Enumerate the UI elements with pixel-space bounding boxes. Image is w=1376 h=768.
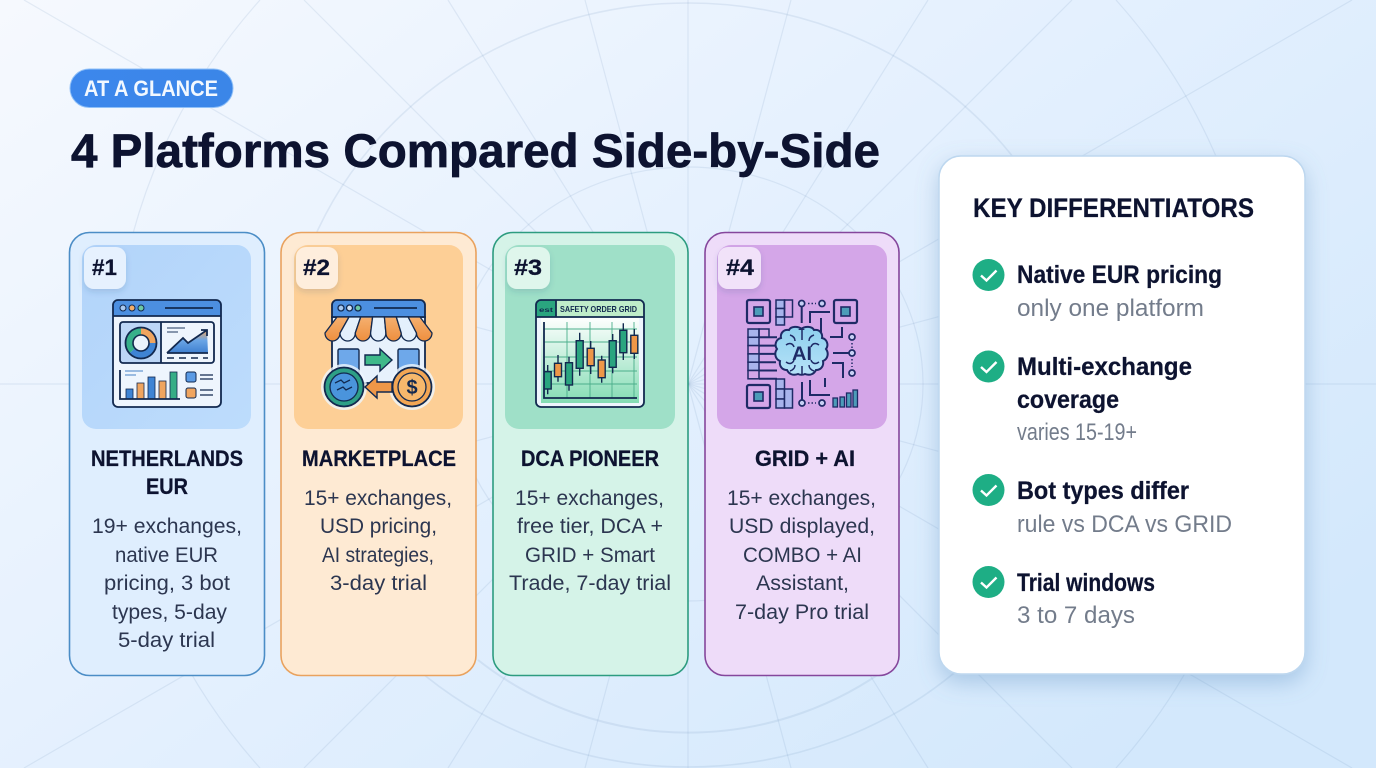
body: card 3: Trade, 7-day trial	[509, 571, 671, 595]
icon panel 1	[82, 245, 251, 429]
rank badge 3	[507, 247, 550, 289]
heading: Marketplace: MARKETPLACE	[302, 446, 456, 471]
icon panel 3	[505, 245, 675, 429]
icon: safety order grid candlestick chart: SAFETY ORDER GRID	[560, 304, 637, 314]
item: native EUR pricing: only one platform	[1017, 295, 1204, 322]
body: card 1: 19+ exchanges,	[92, 514, 242, 538]
heading: DCA Pioneer: DCA PIONEER	[521, 446, 659, 471]
body: card 1: 5-day trial	[118, 628, 215, 652]
item: bot types differ	[972, 474, 1232, 538]
icon: analytics dashboard window	[113, 300, 221, 407]
body: card 3: 15+ exchanges,	[515, 486, 664, 510]
body: card 3: free tier, DCA +	[517, 514, 663, 538]
rank badge 2	[296, 247, 338, 289]
body: card 4	[727, 486, 876, 624]
body: card 2: USD pricing,	[320, 514, 437, 538]
body: card 4: Assistant,	[756, 571, 849, 595]
heading: Netherlands EUR: NETHERLANDS	[91, 446, 243, 471]
item: multi-exchange coverage: coverage	[1017, 386, 1119, 414]
item: bot types differ: Bot types differ	[1017, 477, 1189, 505]
panel: card 1 Netherlands EUR	[70, 232, 264, 676]
body: card 1: types, 5-day	[112, 600, 227, 624]
icon: safety order grid candlestick chart: est	[539, 308, 553, 314]
body: card 3: GRID + Smart	[525, 543, 655, 567]
panel: card 2 Marketplace	[281, 232, 476, 676]
rank badge 3: #3	[514, 255, 542, 280]
icon: marketplace storefront with coins	[321, 300, 435, 410]
body: card 2: AI strategies,	[322, 543, 434, 567]
item: multi-exchange coverage: varies 15-19+	[1017, 419, 1137, 446]
body: card 4: COMBO + AI	[743, 543, 862, 567]
rank badge 4	[718, 247, 761, 289]
icon panel 2	[294, 245, 463, 429]
body: card 1	[92, 514, 242, 652]
heading: Grid + AI: GRID + AI	[755, 446, 855, 471]
rank badge 1: #1	[92, 255, 117, 280]
item: bot types differ: rule vs DCA vs GRID	[1017, 511, 1232, 538]
panel: key differentiators	[939, 156, 1305, 674]
item: multi-exchange coverage	[972, 350, 1192, 446]
title: 4 Platforms Compared Side-by-Side	[71, 125, 880, 178]
item: trial windows	[972, 566, 1155, 629]
icon: AI brain circuit QR grid: AI	[792, 344, 812, 365]
panel: card 4 Grid + AI	[705, 232, 899, 676]
body: card 4: 7-day Pro trial	[735, 600, 869, 624]
body: card 1: pricing, 3 bot	[104, 571, 230, 595]
icon panel 4	[717, 245, 887, 429]
body: card 2	[304, 486, 452, 595]
item: native EUR pricing	[972, 259, 1222, 322]
body: card 2: 15+ exchanges,	[304, 486, 452, 510]
item: multi-exchange coverage: Multi-exchange	[1017, 353, 1192, 381]
heading: Netherlands EUR	[91, 446, 243, 499]
rank badge 1	[84, 247, 126, 289]
panel: card 3 DCA Pioneer	[493, 232, 688, 676]
badge: at a glance: AT A GLANCE	[84, 76, 218, 101]
body: card 3	[509, 486, 671, 595]
item: trial windows: Trial windows	[1017, 569, 1155, 597]
heading: key differentiators: KEY DIFFERENTIATORS	[973, 193, 1254, 223]
heading: Netherlands EUR: EUR	[146, 474, 188, 499]
body: card 2: 3-day trial	[330, 571, 427, 595]
icon: marketplace storefront with coins: $	[406, 377, 418, 399]
item: trial windows: 3 to 7 days	[1017, 602, 1135, 629]
item: native EUR pricing: Native EUR pricing	[1017, 261, 1222, 289]
badge: at a glance	[70, 69, 233, 108]
body: card 4: USD displayed,	[729, 514, 875, 538]
rank badge 4: #4	[726, 255, 755, 280]
icon: AI brain circuit QR grid	[747, 300, 858, 408]
body: card 4: 15+ exchanges,	[727, 486, 876, 510]
icon: safety order grid candlestick chart	[536, 300, 644, 407]
body: card 1: native EUR	[115, 543, 218, 567]
rank badge 2: #2	[303, 255, 330, 280]
